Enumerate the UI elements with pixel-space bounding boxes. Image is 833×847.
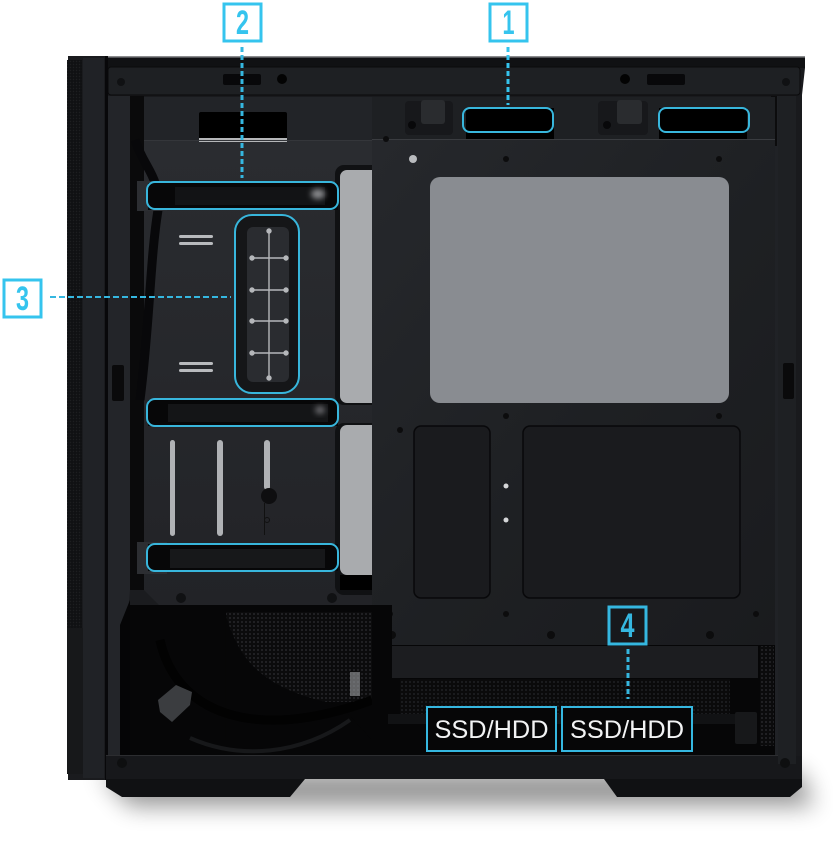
SSD/HDD label right <box>562 707 692 751</box>
left cage and cable channel <box>125 97 372 645</box>
gray side openings <box>335 165 389 595</box>
label 2: 2 <box>236 4 249 42</box>
grommet: vertical cable pass-through <box>235 215 299 393</box>
leader line 1 <box>506 47 510 105</box>
lower chamber <box>120 600 775 756</box>
label 3 <box>4 280 41 318</box>
leader line 2 <box>240 47 244 178</box>
label 4 <box>609 607 646 645</box>
label 1 <box>490 4 527 42</box>
top brackets and cutouts <box>117 74 790 139</box>
front panel <box>67 56 108 780</box>
bottom rail and feet <box>106 96 802 797</box>
case body <box>106 56 805 779</box>
blue highlight outlines <box>147 108 749 571</box>
vertical slots <box>170 440 277 536</box>
motherboard tray <box>372 97 775 645</box>
SSD/HDD label left <box>427 707 556 751</box>
large gray opening <box>430 177 729 403</box>
label 1: 1 <box>502 4 514 42</box>
leader line 4 <box>626 649 630 699</box>
SSD/HDD label right: SSD/HDD <box>570 716 684 744</box>
tray screws <box>383 121 759 639</box>
floor shadow <box>100 772 814 806</box>
label 3: 3 <box>16 280 29 318</box>
rubber grommets <box>148 183 338 571</box>
label 2 <box>224 4 261 42</box>
label 4: 4 <box>620 607 635 645</box>
lower tray covers <box>414 426 740 598</box>
leader line 3 <box>50 296 231 298</box>
small side slots <box>179 235 213 372</box>
SSD/HDD label left: SSD/HDD <box>434 716 548 744</box>
